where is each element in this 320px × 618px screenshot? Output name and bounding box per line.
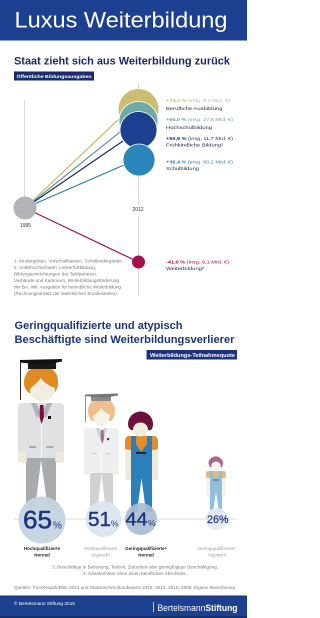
footnotes 3 and 4: 3: Beschäftige in Befristung, Teilzeit, Zeitarbeit oder geringfügiger Beschäftigung. xyxy=(52,564,218,570)
footer xyxy=(0,596,247,618)
footnotes 1 and 2: Verbände und Kammern, Weiterbildungsförderung xyxy=(14,278,120,283)
heading: section 2: Geringqualifizierte und atypisch xyxy=(14,320,183,332)
face xyxy=(211,462,221,470)
bubble: 51 percent xyxy=(86,501,122,537)
footnotes 1 and 2: 1: Kindergärten, Vorschulklassen, Schulkindergärten xyxy=(14,258,123,264)
value label: further education: Weiterbildung² xyxy=(166,266,204,272)
mortarboard xyxy=(85,394,118,422)
footnotes 3 and 4 xyxy=(52,564,218,576)
hair xyxy=(208,456,223,467)
figure: low qualified, normal employment xyxy=(125,411,158,512)
circle: further education xyxy=(132,256,145,268)
face xyxy=(30,378,55,401)
footer: © Bertelsmann Stiftung 2015 xyxy=(14,601,76,606)
circle: vocational training xyxy=(118,89,158,129)
bubble: 65 percent: 65 xyxy=(23,506,52,534)
caption: highly qualified normal xyxy=(24,546,61,558)
label: participation rate xyxy=(146,350,237,360)
value label: further education: -41,0 % (insg. 6,1 Mrd. €) xyxy=(166,260,229,266)
caption: highly qualified atypical xyxy=(84,546,118,558)
face xyxy=(133,422,148,436)
bubble: 65 percent: % xyxy=(53,520,62,532)
footnotes 3 and 4: 4: Arbeitnehmer ohne einen beruflichen Abschluss. xyxy=(83,571,187,576)
footnotes 1 and 2: Bildungseinrichtungen der Tarifparteien, xyxy=(14,272,97,276)
infographic xyxy=(0,0,247,618)
caption: highly qualified normal: Normal xyxy=(34,552,50,558)
value label: early education: Frühkindliche Bildung¹ xyxy=(166,142,223,148)
caption: low qualified normal: Geringqualifizierte⁴ xyxy=(125,546,167,551)
caption: low qualified atypical: Geringqualifizierte⁴ xyxy=(198,546,236,551)
mortarboard xyxy=(20,359,62,400)
caption: low qualified normal xyxy=(125,546,167,558)
footer: BertelsmannStiftung xyxy=(158,603,238,613)
hair xyxy=(88,398,115,421)
year label 2012: 2012 xyxy=(132,207,144,213)
label: public education spending: Öffentliche Bildungsausgaben xyxy=(16,73,92,80)
bubble: 51 percent: 51 xyxy=(88,509,111,531)
value label: higher education xyxy=(166,117,233,131)
caption: low qualified atypical xyxy=(198,546,236,558)
circle: 1995 baseline xyxy=(14,196,36,220)
circle: school education xyxy=(123,144,155,176)
heading: section 1: Staat zieht sich aus Weiterbildung zurück xyxy=(14,56,231,68)
baseline xyxy=(13,518,237,520)
bubble: 65 percent xyxy=(18,496,66,544)
circle: higher education xyxy=(119,102,158,140)
footnotes 1 and 2: (Rechnungsansatz der statistischen Bundesamtes). xyxy=(14,291,118,296)
label: public education spending xyxy=(14,72,94,80)
header banner with title xyxy=(0,0,247,40)
caption: highly qualified atypical: Hochqualifizierte xyxy=(84,546,118,551)
figure: low qualified, atypical employment xyxy=(206,456,226,512)
bubble: 51 percent: % xyxy=(111,518,119,528)
value label: higher education: Hochschulbildung xyxy=(166,125,212,131)
label: participation rate: Weiterbildungs-Teilnahmequote xyxy=(150,353,235,359)
bubble: 44 percent: 44 xyxy=(126,510,148,530)
caption: low qualified normal: Normal xyxy=(138,552,154,558)
sources: Quellen: Frick/Noack/Blim 2013 und Statistisches Bundesamt 2015, 2014, 2010, 2008. Eigene Berechnung xyxy=(14,585,236,590)
caption: low qualified atypical: Atypisch³ xyxy=(208,552,227,558)
value label: further education xyxy=(166,260,229,272)
figure: highly qualified, atypical employment xyxy=(84,394,119,512)
heading: section 2: Beschäftigte sind Weiterbildungsverlierer xyxy=(14,334,235,346)
value label: school education xyxy=(166,160,233,172)
figure: highly qualified, normal employment xyxy=(18,359,64,510)
value label: school education: +36,4 % (insg. 60,2 Mrd. €) xyxy=(166,160,233,166)
value label: higher education: +66,0 % (insg. 27,8 Mrd. €) xyxy=(166,117,233,123)
footnotes 1 and 2 xyxy=(14,258,123,296)
value label: school education: Schulbildung xyxy=(166,166,199,172)
face xyxy=(93,408,110,426)
caption: highly qualified normal: Hochqualifizierte xyxy=(24,546,61,551)
footnotes 1 and 2: 2: Volkshochschulen, Lehrerfortbildung, xyxy=(14,265,96,270)
footnotes 1 and 2: der BA, inkl. Ausgaben für betriebliche Weiterbildung xyxy=(14,284,122,290)
bubble: 26 percent: 26% xyxy=(207,514,229,526)
circle: early education xyxy=(120,112,157,148)
heading: section 2 xyxy=(14,320,235,346)
hair xyxy=(24,366,58,393)
year label 1995: 1995 xyxy=(20,223,31,229)
caption: highly qualified atypical: Atypisch³ xyxy=(91,552,110,558)
value label: vocational training xyxy=(166,98,230,112)
value label: vocational training: +74,4 % (insg. 9,2 Mrd. €) xyxy=(166,98,230,104)
value label: early education xyxy=(166,136,233,148)
bubble: 26 percent xyxy=(206,508,229,530)
value label: early education: +59,9 % (insg. 11,7 Mrd. €) xyxy=(166,136,233,142)
bubble: 44 percent xyxy=(125,503,157,535)
value label: vocational training: Berufliche Ausbildung xyxy=(166,106,223,112)
slope chart: education spending 1995 to 2012 xyxy=(14,83,158,296)
hair xyxy=(128,411,153,430)
bubble: 44 percent: % xyxy=(148,518,156,528)
header banner with title: Luxus Weiterbildung xyxy=(14,8,228,32)
